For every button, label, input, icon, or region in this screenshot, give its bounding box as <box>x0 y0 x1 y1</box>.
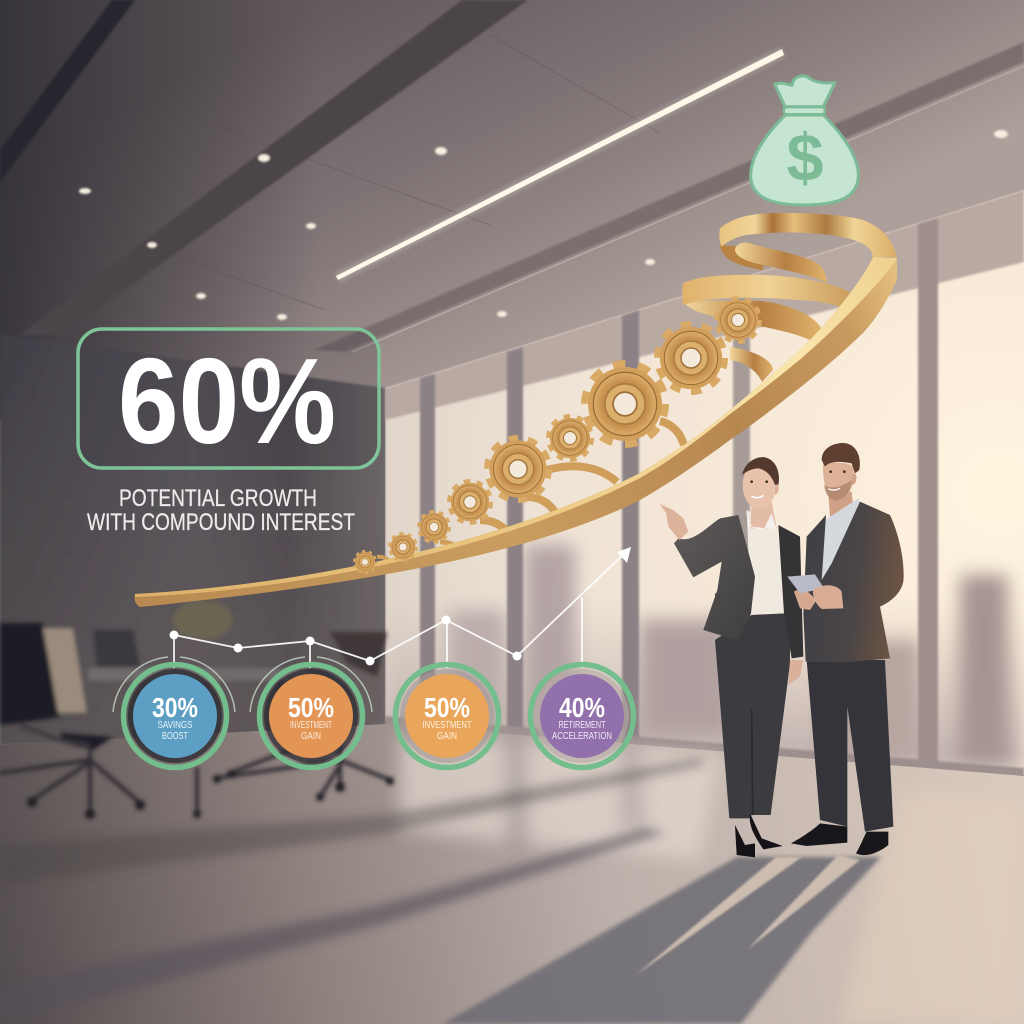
metric: investment gain one: GAIN <box>301 730 321 742</box>
floor light reflections <box>400 735 1024 1024</box>
tablet and hands <box>787 574 843 610</box>
metric: savings boost <box>113 657 235 768</box>
metric: retirement acceleration: RETIREMENT <box>558 719 606 731</box>
metric: investment gain two: 50% <box>424 692 470 723</box>
stat box <box>78 329 379 468</box>
gear 8 <box>659 326 723 390</box>
metric: retirement acceleration: ACCELERATION <box>552 730 612 742</box>
ribbon lower face <box>135 257 897 607</box>
metric: retirement acceleration <box>530 664 634 768</box>
stat value: 60% <box>118 333 336 469</box>
gold spiral ramp <box>135 213 897 607</box>
gear 7 <box>587 366 663 442</box>
arrow head <box>617 547 631 563</box>
woman <box>659 457 803 857</box>
gear 5 <box>488 439 548 499</box>
man <box>791 443 904 855</box>
gear chain <box>355 299 759 572</box>
conference furniture <box>0 600 394 819</box>
floor shadows <box>0 758 705 1024</box>
window header shade <box>385 190 1024 420</box>
gear 2 <box>390 534 416 560</box>
metric: retirement acceleration: 40% <box>559 692 605 723</box>
blurred city skyline <box>385 545 1024 770</box>
gear 3 <box>419 512 449 542</box>
floor <box>0 724 1024 1024</box>
metric: investment gain one <box>250 657 372 768</box>
window wall <box>385 190 1024 778</box>
gear 9 <box>717 299 759 341</box>
metric: investment gain two <box>396 664 498 768</box>
left wall <box>0 335 385 745</box>
gear support fins <box>377 421 684 561</box>
chart: growth line <box>170 547 631 668</box>
gear 4 <box>450 482 490 522</box>
metric: savings boost: SAVINGS <box>158 719 192 731</box>
ceiling beams and strip light <box>0 0 1024 352</box>
icon: money bag: $ <box>786 122 824 196</box>
icon: money bag <box>751 76 858 205</box>
gear 1 <box>355 552 375 572</box>
metric: savings boost: 30% <box>152 692 198 723</box>
caption: potential growth: POTENTIAL GROWTH <box>119 485 317 512</box>
gear 6 <box>549 417 591 459</box>
light wedges in shadow <box>636 855 860 975</box>
upper coils <box>682 213 897 382</box>
caption: potential growth: WITH COMPOUND INTEREST <box>87 509 355 536</box>
metric: investment gain one: 50% <box>288 692 334 723</box>
metric: investment gain two: GAIN <box>437 730 457 742</box>
ribbon upper face <box>135 257 897 597</box>
caption: potential growth <box>87 485 355 536</box>
metric: investment gain one: INVESTMENT <box>290 719 332 731</box>
metric: investment gain two: INVESTMENT <box>422 719 472 731</box>
people <box>659 443 904 857</box>
window mullions <box>420 218 938 768</box>
window sill <box>385 716 1024 778</box>
ceiling <box>0 0 1024 420</box>
metric: savings boost: BOOST <box>162 730 188 742</box>
panel: main statistic <box>78 329 379 469</box>
people floor shadow <box>442 857 881 1024</box>
